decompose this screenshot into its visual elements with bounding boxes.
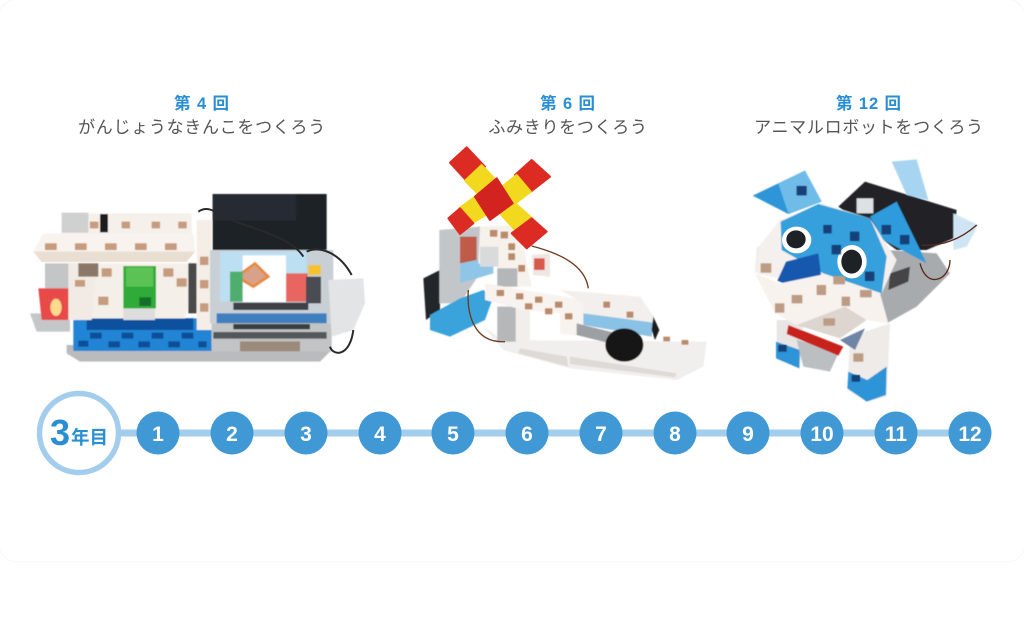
heading: lesson 6 xyxy=(488,93,648,137)
step 4: 4 xyxy=(374,423,386,446)
crossing signal xyxy=(448,147,550,248)
step 4 xyxy=(358,412,402,454)
brick studs xyxy=(761,186,909,382)
step 8: 8 xyxy=(669,423,681,446)
step 3 xyxy=(284,412,328,454)
heading: lesson 4: 第 4 回 xyxy=(174,93,230,113)
step 1 xyxy=(136,412,180,454)
heading: lesson 12: 第 12 回 xyxy=(836,93,902,113)
step 2: 2 xyxy=(226,423,238,446)
step 5: 5 xyxy=(447,423,459,446)
step 5 xyxy=(432,412,474,454)
timeline xyxy=(40,394,992,472)
heading: lesson 4 xyxy=(78,93,326,137)
step 11: 11 xyxy=(885,423,907,446)
robot: animal xyxy=(753,159,978,402)
step 11 xyxy=(874,412,918,454)
step 10 xyxy=(800,412,844,454)
step 3: 3 xyxy=(300,423,312,446)
robot: railway crossing xyxy=(423,147,707,380)
connector line xyxy=(79,430,970,436)
eyes xyxy=(782,227,867,278)
step 12: 12 xyxy=(958,423,982,446)
step 2 xyxy=(210,412,254,454)
heading: lesson 12 xyxy=(754,93,984,137)
step 7: 7 xyxy=(595,423,607,446)
step 9 xyxy=(726,412,770,454)
wires xyxy=(920,225,977,280)
robot: safe xyxy=(30,194,365,362)
step 8 xyxy=(654,412,696,454)
step 6: 6 xyxy=(521,423,533,446)
heading: lesson 6: 第 6 回 xyxy=(540,93,596,113)
wires xyxy=(198,209,353,353)
heading: lesson 6: ふみきりをつくろう xyxy=(488,118,648,137)
brick studs xyxy=(45,222,208,312)
badge: year 3 xyxy=(40,394,118,472)
heading: lesson 12: アニマルロボットをつくろう xyxy=(754,118,984,137)
heading: lesson 4: がんじょうなきんこをつくろう xyxy=(78,118,326,137)
badge: year 3: 3 xyxy=(50,412,70,453)
step 9: 9 xyxy=(742,423,754,446)
badge: year 3: 年目 xyxy=(71,427,108,448)
cable xyxy=(468,246,588,342)
step 12 xyxy=(948,412,992,454)
step 6 xyxy=(506,412,548,454)
brick studs xyxy=(490,230,688,345)
step 7 xyxy=(580,412,622,454)
step 1: 1 xyxy=(152,423,164,446)
step 10: 10 xyxy=(810,423,834,446)
